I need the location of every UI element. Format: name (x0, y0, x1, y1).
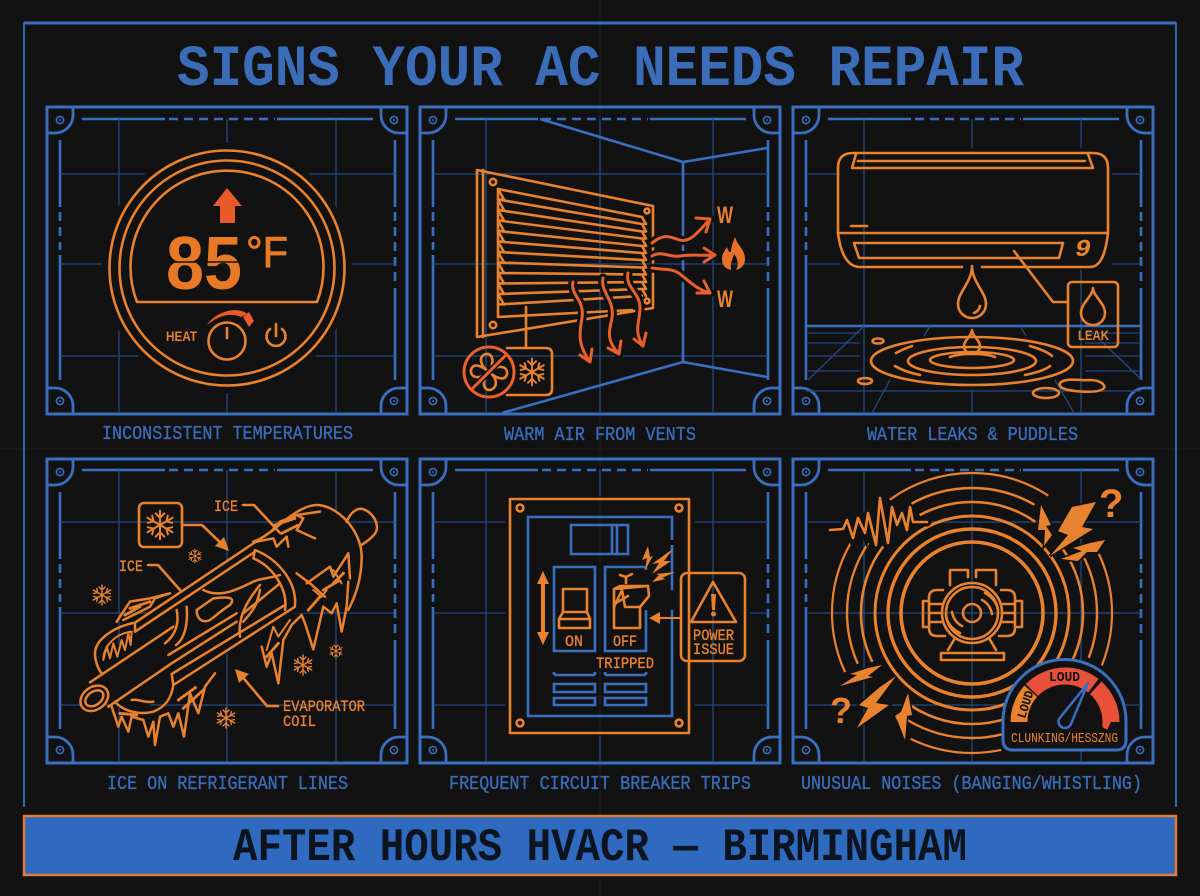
icon: evaporator pipe (76, 505, 377, 745)
grid (60, 470, 395, 762)
grid (806, 119, 1141, 413)
off label: OFF (613, 633, 637, 651)
ice label (119, 558, 180, 590)
evaporator coil label: COIL (283, 713, 316, 731)
panel frame (793, 107, 1153, 414)
footer banner (24, 816, 1176, 875)
W label: W (717, 202, 733, 229)
title: SIGNS YOUR AC NEEDS REPAIR (177, 38, 1024, 103)
icon: snowflake box (139, 503, 182, 547)
icon: sparks (642, 546, 675, 582)
snowflakes (93, 549, 342, 728)
arrows: warm air outward (652, 218, 715, 293)
question mark: ? (1099, 482, 1123, 526)
caption: FREQUENT CIRCUIT BREAKER TRIPS (449, 773, 751, 795)
loudness gauge: LOUD (1015, 689, 1038, 720)
icon: wall AC unit (838, 153, 1108, 267)
caption: WATER LEAKS & PUDDLES (867, 424, 1078, 446)
heat label: HEAT (166, 328, 197, 344)
grid (433, 119, 768, 413)
panel frame (47, 459, 407, 763)
icon: dial (207, 310, 254, 360)
gauge needle (1058, 683, 1088, 728)
panel: ice on refrigerant lines (47, 459, 407, 795)
temperature reading: °F (246, 228, 288, 277)
icon: power (266, 324, 286, 346)
unit display: 9 (1075, 237, 1091, 264)
on label: ON (565, 633, 583, 651)
panel: inconsistent temperatures (47, 107, 407, 445)
ice label (214, 498, 280, 533)
room perspective lines (502, 119, 767, 413)
panel frame (47, 107, 407, 414)
panel frame (420, 459, 780, 763)
power issue callout: ISSUE (693, 641, 734, 659)
caption: INCONSISTENT TEMPERATURES (102, 423, 353, 445)
icon: vent grille (477, 170, 653, 337)
icon: stopped fan and snowflake (464, 307, 552, 397)
on switch (559, 589, 590, 628)
icon: lightning bolts lower (840, 665, 912, 740)
question mark: ? (830, 690, 852, 731)
leak label: LEAK (1078, 327, 1109, 343)
panel frame (793, 459, 1153, 763)
arrows: warm air downward (573, 273, 646, 362)
evaporator coil label: EVAPORATOR (283, 698, 365, 716)
icon: lightning bolts upper (1038, 502, 1105, 561)
power issue callout: POWER (693, 627, 734, 645)
arrow: issue to breaker (649, 612, 682, 624)
icicles (112, 512, 350, 745)
loudness gauge (1003, 659, 1126, 768)
panel: warm air from vents (420, 107, 780, 446)
double arrow (537, 571, 549, 645)
arrow: snowflake to pipe (182, 525, 229, 551)
ice label: ICE (119, 558, 143, 576)
grid (433, 470, 768, 762)
panel: water leaks and puddles (793, 107, 1153, 446)
power issue callout (681, 573, 745, 661)
tripped label: TRIPPED (596, 655, 654, 673)
sound rings (832, 473, 1112, 753)
caption: ICE ON REFRIGERANT LINES (107, 773, 348, 795)
grid (60, 119, 395, 413)
icon: motor (923, 570, 1022, 660)
evaporator coil label (235, 669, 365, 731)
icon: puddle (858, 330, 1104, 398)
floor (806, 326, 1142, 413)
icon: up arrow (213, 188, 242, 223)
panel frame (420, 107, 780, 414)
tripped switch (614, 574, 649, 628)
W label: W (717, 286, 733, 313)
temperature reading (160, 221, 288, 305)
caption: WARM AIR FROM VENTS (504, 424, 696, 446)
icon: breaker panel (510, 499, 689, 733)
gauge label: CLUNKING/HESSZNG (1011, 731, 1118, 747)
footer text: AFTER HOURS HVACR — BIRMINGHAM (233, 822, 967, 874)
grid (806, 470, 1141, 762)
caption: UNUSUAL NOISES (BANGING/WHISTLING) (801, 773, 1142, 795)
icon: falling drop (958, 266, 986, 318)
temperature reading: 85 (166, 221, 242, 305)
ice label: ICE (214, 498, 238, 516)
icon: flame (722, 237, 745, 270)
waveform (830, 498, 927, 545)
panel: unusual noises (793, 459, 1153, 795)
loudness gauge: LOUD (1049, 670, 1080, 686)
panel: frequent circuit breaker trips (420, 459, 780, 795)
leak label (1068, 282, 1118, 347)
icon: thermostat (110, 150, 344, 386)
leader to leak label (1014, 251, 1068, 302)
